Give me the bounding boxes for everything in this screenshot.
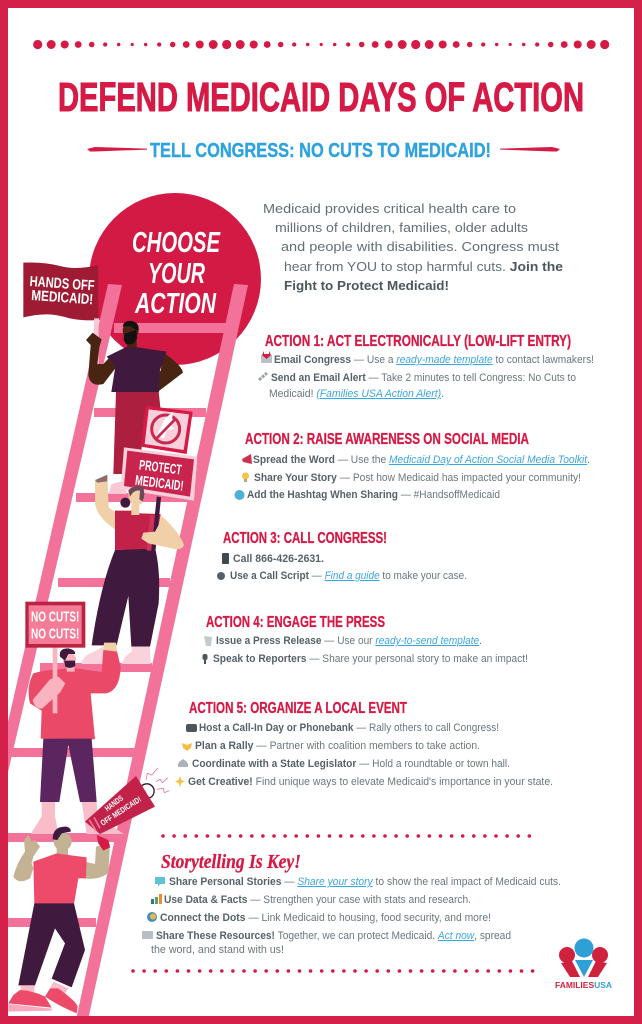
item: hashtag: Add the Hashtag When Sharing — #HandsoffMedicaid [247,489,500,501]
icon: handshake [182,743,192,751]
item: press release: Issue a Press Release — Use our ready-to-send template. [216,635,482,647]
item: personal stories: Share Personal Stories — Share your story to show the real impact of Medicaid cuts. [169,876,561,888]
choose your action circle: CHOOSE [132,227,221,259]
storytelling section [142,851,561,956]
intro paragraph: Fight to Protect Medicaid! [284,278,449,293]
item: call script: Use a Call Script — Find a guide to make your case. [230,570,467,582]
icon: megaphone [242,454,252,464]
heading: storytelling is key: Storytelling Is Key! [161,851,301,873]
protect medicaid sign [121,447,197,501]
intro paragraph: Medicaid provides critical health care to [263,201,516,216]
action 5 [175,700,553,788]
item: send an email alert: Send an Email Alert — Take 2 minutes to tell Congress: No Cuts to [271,372,576,384]
no cuts sign [25,602,85,648]
heading: action 5: ACTION 5: ORGANIZE A LOCAL EVENT [189,700,407,717]
icon: speech bubble [155,877,165,887]
heading: action 3: ACTION 3: CALL CONGRESS! [223,530,387,547]
intro paragraph: millions of children, families, older adults [275,220,528,235]
item: share your story: Share Your Story — Post how Medicaid has impacted your community! [254,472,581,484]
icon: envelope [261,351,272,363]
item: send an email alert [269,372,576,400]
item: send an email alert: Medicaid! (Families USA Action Alert). [269,388,444,400]
heading: action 2: ACTION 2: RAISE AWARENESS ON SOCIAL MEDIA [245,431,529,448]
item: share these resources: the word, and stand with us! [151,944,284,956]
item: speak to reporters: Speak to Reporters — Share your personal story to make an impact! [213,653,528,665]
choose your action circle [89,193,261,365]
no-sign placard [141,406,193,454]
top dotted row [33,40,609,49]
person 2 with protect medicaid sign [82,447,197,664]
icon: hashtag [234,490,244,500]
woman's head [120,486,144,515]
icon: press release [204,636,212,646]
action 3 [217,530,467,582]
intro paragraph [263,201,563,293]
dotted divider lower [133,969,535,973]
icon: book [142,931,153,939]
protect medicaid sign: MEDICAID! [134,472,185,494]
protect medicaid sign: PROTECT [138,456,183,478]
no cuts sign: NO CUTS! [31,608,79,625]
flag: hands off medicaid: MEDICAID! [31,288,94,308]
dotted divider upper [163,834,531,838]
item: get creative: Get Creative! Find unique ways to elevate Medicaid's importance in your state. [188,776,553,788]
logo: families usa [555,938,612,990]
no cuts sign: NO CUTS! [31,626,79,643]
item: plan a rally: Plan a Rally — Partner with coalition members to take action. [195,740,480,752]
item: data and facts: Use Data & Facts — Strengthen your case with stats and research. [164,894,471,906]
item: connect the dots: Connect the Dots — Link Medicaid to housing, food security, and more! [160,912,491,924]
icon: microphone [202,654,208,664]
item: spread the word: Spread the Word — Use the Medicaid Day of Action Social Media Toolkit. [253,454,590,466]
flag: hands off medicaid: HANDS OFF [29,274,95,295]
logo: families usa: FAMILIES USA [555,981,612,990]
megaphone: HANDS [103,793,125,813]
item: share these resources [151,930,511,956]
item: call: Call 866-426-2631. [233,553,324,565]
megaphone [85,768,169,851]
icon: speaking head [217,572,225,580]
heading: action 4: ACTION 4: ENGAGE THE PRESS [206,614,385,631]
action 4 [202,614,528,665]
person 3 with no cuts sign [25,602,121,739]
choose your action circle: YOUR [148,258,205,290]
person 1 with flag [23,262,183,474]
item: host: Host a Call-In Day or Phonebank — Rally others to call Congress! [199,722,499,734]
icon: globe [147,912,157,922]
megaphone: OFF MEDICAID! [99,795,143,828]
person 4 with megaphone [8,739,169,1013]
icon: bar chart [151,894,162,904]
item: share these resources: Share These Resources! Together, we can protect Medicaid. Act now, spread [156,930,511,942]
item: coordinate: Coordinate with a State Legislator — Hold a roundtable or town hall. [192,758,510,770]
icon: sparkles [175,776,185,787]
intro paragraph: and people with disabilities. Congress must [281,239,559,254]
icon: light bulb [242,472,249,482]
flag: hands off medicaid [23,262,98,320]
action 2 [234,431,590,501]
ladder [0,284,248,1020]
icon: phone [222,553,229,564]
item: email congress: Email Congress — Use a ready-made template to contact lawmakers! [274,354,594,366]
choose your action circle: ACTION [134,288,217,320]
intro paragraph: hear from YOU to stop harmful cuts. Join the [284,259,563,274]
action 1 [259,333,594,400]
subtitle with side rules: TELL CONGRESS: NO CUTS TO MEDICAID! [150,139,491,162]
icon: capitol [178,759,188,767]
icon: telephone [186,724,197,732]
icon: link [259,373,267,380]
